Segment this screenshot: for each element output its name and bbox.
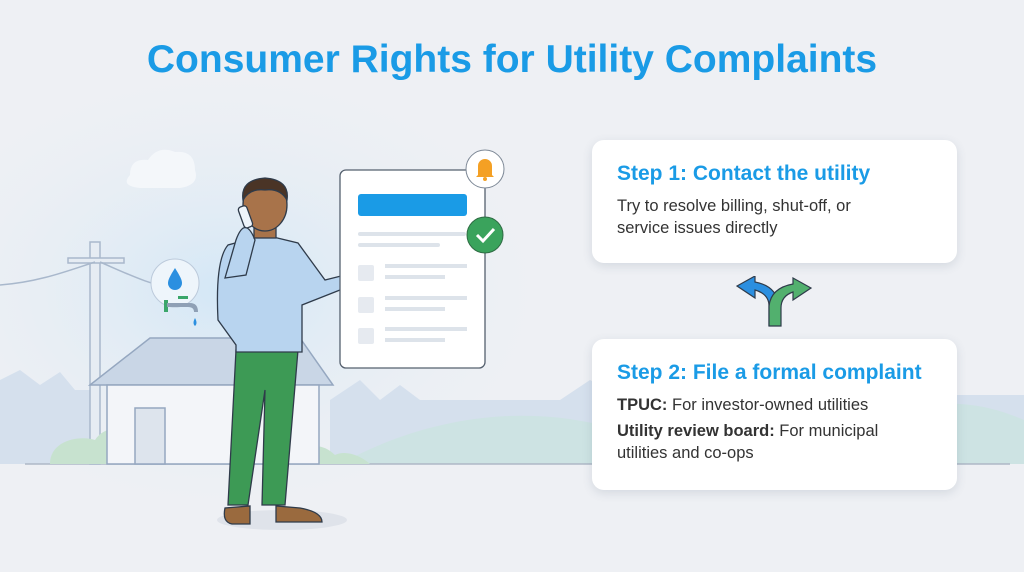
document panel [340, 170, 485, 368]
card: step 1: service issues directly [617, 219, 777, 237]
person [217, 178, 368, 530]
card: step 1 [592, 140, 957, 263]
card: step 2: Step 2: File a formal complaint [617, 361, 922, 384]
icon: water drop and tap [151, 259, 199, 326]
illustration: house and pole [0, 150, 504, 530]
card: step 1: Step 1: Contact the utility [617, 162, 870, 185]
card: step 2 [592, 339, 957, 490]
card: step 2: utilities and co-ops [617, 444, 754, 462]
card: step 2: TPUC: For investor-owned utilities [617, 396, 868, 414]
card: step 2: Utility review board: For municipal [617, 422, 878, 440]
icon: bell [466, 150, 504, 188]
title: Consumer Rights for Utility Complaints [147, 38, 877, 81]
card: step 1: Try to resolve billing, shut-off, or [617, 197, 851, 215]
bushes [50, 429, 370, 464]
pole [0, 242, 180, 464]
house [90, 338, 333, 464]
icon: check [467, 217, 503, 253]
arrow: fork [736, 276, 812, 327]
